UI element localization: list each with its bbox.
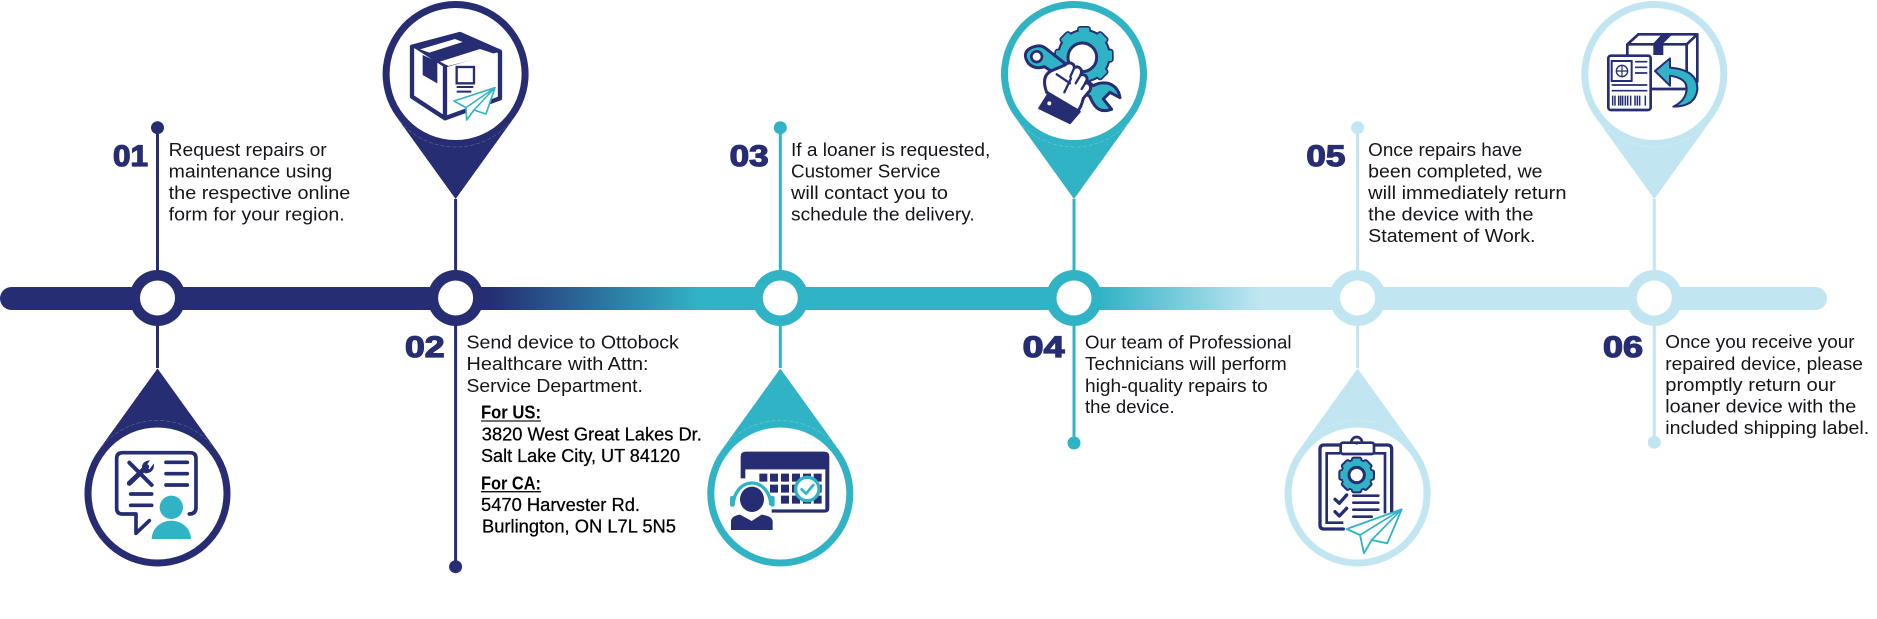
number 01: 01 [113, 140, 148, 173]
text: step 01: Request repairs or [169, 140, 327, 160]
text: step 06: repaired device, please [1665, 354, 1863, 374]
stem 06 [1653, 199, 1656, 442]
node 05 [1330, 270, 1386, 326]
node 03 [752, 270, 808, 326]
address: CA [481, 474, 676, 537]
number 06: 06 [1603, 331, 1643, 364]
text: step 03: schedule the delivery. [791, 204, 975, 224]
text: step 05: been completed, we [1368, 162, 1542, 182]
stem 03 [779, 128, 782, 368]
icon: request form with tools and person [117, 453, 196, 539]
text: step 01: the respective online [169, 183, 350, 203]
text: step 01: form for your region. [169, 204, 345, 224]
step 06: marker, stem, pin and icon [1581, 1, 1727, 449]
stem 01 [156, 128, 159, 368]
text: step 05 [1367, 140, 1566, 246]
icon: return parcel with shipping label [1608, 34, 1697, 110]
node 02 [428, 270, 484, 326]
address: US: For US: [481, 403, 541, 423]
pin 05 [1285, 368, 1431, 566]
stem 02 [454, 199, 457, 567]
text: step 04: Our team of Professional [1085, 333, 1292, 353]
number 05: 05 [1306, 140, 1345, 173]
node 04 [1046, 270, 1102, 326]
text: step 05: Once repairs have [1368, 140, 1522, 160]
step 05: marker, stem, pin and icon [1285, 121, 1431, 566]
icon: calendar with support agent [730, 452, 829, 530]
stem dot 01 [151, 121, 164, 134]
address: CA: 5470 Harvester Rd. [481, 495, 640, 515]
pin 02 [383, 1, 529, 199]
text: step 01 [169, 140, 350, 224]
step 03: marker, stem, pin and icon [707, 121, 853, 566]
number 02: 02 [405, 331, 445, 364]
pin 04 [1001, 1, 1147, 199]
stem dot 04 [1068, 436, 1080, 450]
text: step 03 [790, 140, 990, 224]
address: CA: Burlington, ON L7L 5N5 [482, 517, 676, 537]
text: step 01: maintenance using [169, 162, 332, 182]
text: step 02: Send device to Ottobock [466, 333, 680, 353]
node 06 [1626, 270, 1682, 326]
stem dot 03 [774, 121, 787, 134]
text: step 04: the device. [1085, 397, 1175, 417]
step 02: marker, stem, pin and icon [383, 1, 529, 573]
text: step 06: Once you receive your [1665, 332, 1855, 352]
timeline bar [0, 287, 1827, 310]
node 01 [130, 270, 186, 326]
text: step 02: Healthcare with Attn: [466, 354, 648, 374]
stem dot 06 [1648, 436, 1661, 449]
step 04: marker, stem, pin and icon [1001, 1, 1147, 450]
address: US [481, 403, 702, 466]
icon: hand holding wrench and gear [1025, 27, 1120, 123]
icon: clipboard with gear and paper plane [1320, 437, 1402, 553]
text: step 02: Service Department. [466, 376, 643, 396]
text: step 04: Technicians will perform [1085, 354, 1287, 374]
text: step 04: high-quality repairs to [1085, 376, 1268, 396]
stem 05 [1356, 128, 1359, 368]
address: US: 3820 West Great Lakes Dr. [482, 425, 702, 445]
stem dot 05 [1351, 121, 1364, 134]
text: step 03: will contact you to [790, 183, 948, 203]
text: step 06 [1665, 332, 1869, 438]
text: step 06: promptly return our [1665, 375, 1836, 395]
text: step 02 [466, 333, 680, 396]
text: step 06: loaner device with the [1665, 397, 1856, 417]
text: step 05: Statement of Work. [1368, 226, 1536, 246]
text: step 03: Customer Service [791, 162, 940, 182]
icon: parcel with paper plane [412, 34, 500, 120]
stem dot 02 [449, 560, 462, 573]
pin 06 [1581, 1, 1727, 199]
step 01: marker, stem, pin and icon [84, 121, 230, 566]
text: step 04 [1085, 333, 1292, 417]
text: step 03: If a loaner is requested, [791, 140, 990, 160]
number 03: 03 [730, 140, 769, 173]
pin 03 [707, 368, 853, 566]
text: step 05: will immediately return [1367, 183, 1566, 203]
address: US: Salt Lake City, UT 84120 [481, 446, 680, 466]
address: CA: For CA: [481, 474, 541, 494]
text: step 05: the device with the [1368, 204, 1534, 224]
pin 01 [84, 368, 230, 566]
stem 04 [1072, 199, 1076, 443]
text: step 06: included shipping label. [1665, 418, 1869, 438]
number 04: 04 [1023, 331, 1065, 364]
